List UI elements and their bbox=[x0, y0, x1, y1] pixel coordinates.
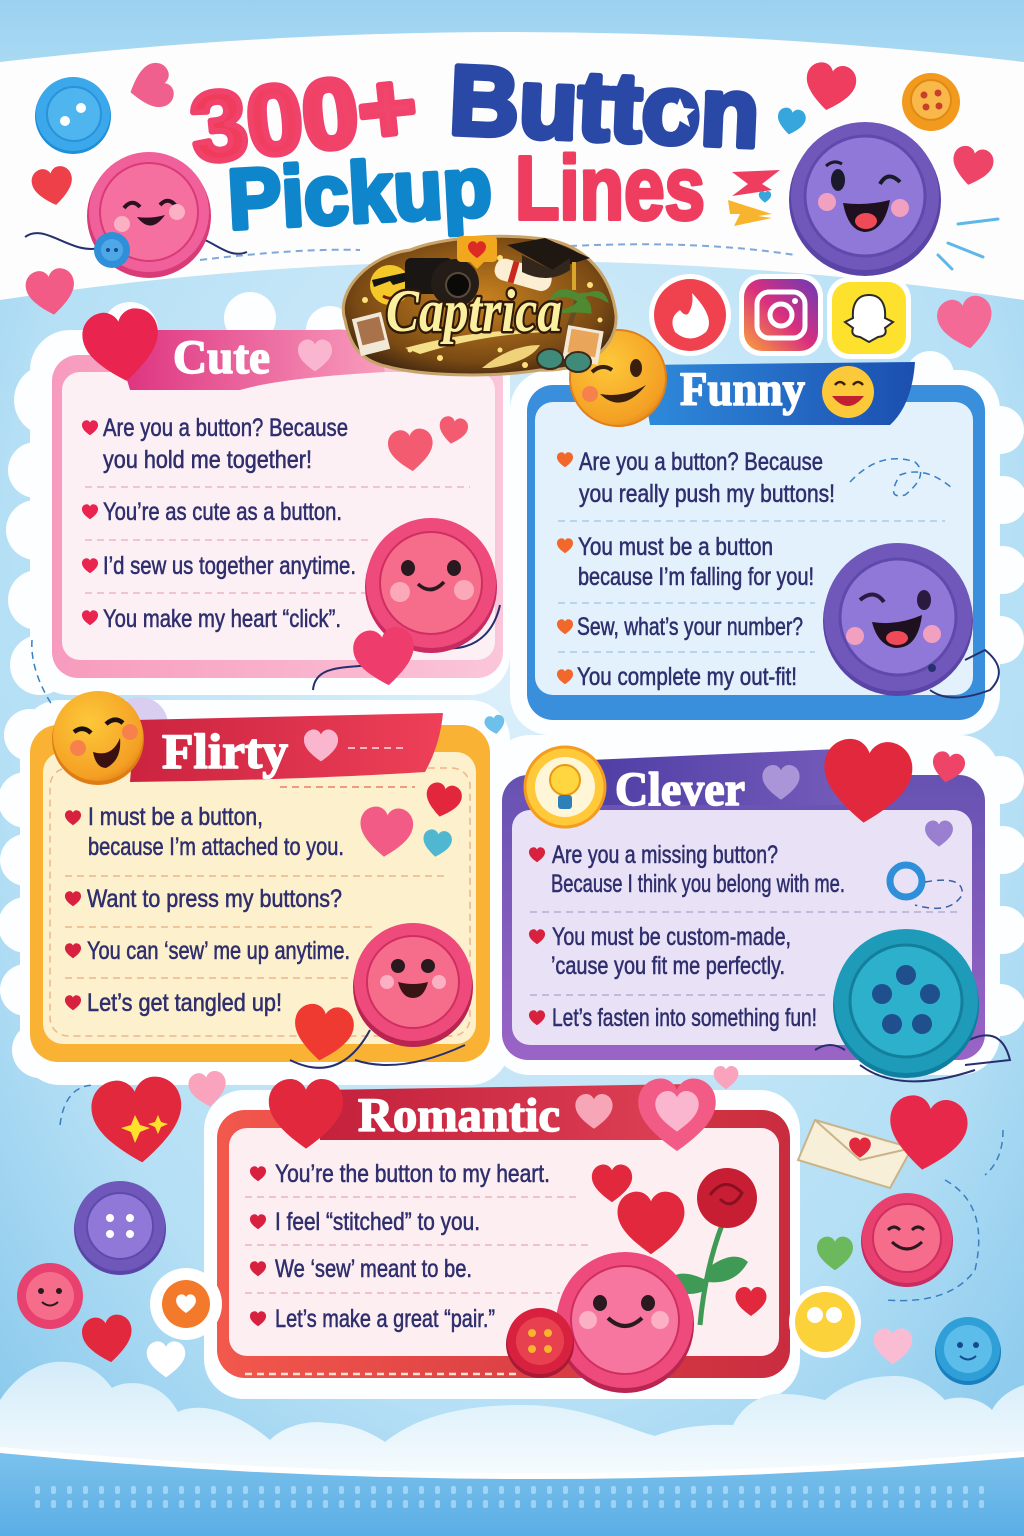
heading heart bbox=[298, 340, 332, 371]
logo sunglasses bbox=[537, 349, 591, 372]
panel body bbox=[43, 752, 476, 1044]
panel frame bbox=[52, 355, 503, 678]
logo camera bbox=[405, 258, 479, 307]
dividers bbox=[558, 521, 945, 652]
title: Lines: Lines bbox=[515, 139, 705, 239]
dividers bbox=[530, 912, 960, 995]
panel frame bbox=[502, 775, 985, 1060]
title: 300+: 300+ bbox=[186, 50, 422, 183]
dividers bbox=[85, 487, 470, 593]
icon: laughing emoji bbox=[822, 366, 874, 418]
panel body bbox=[512, 810, 972, 1045]
logo swoosh bbox=[405, 330, 558, 354]
heading: Flirty bbox=[162, 723, 288, 779]
icon: zigzag flags bbox=[728, 170, 780, 226]
line 2: You’re as cute as a button. bbox=[103, 498, 342, 526]
logo scroll bbox=[492, 256, 554, 293]
header ribbon bbox=[640, 362, 915, 425]
icon: light bulb badge bbox=[525, 747, 605, 827]
title bbox=[186, 44, 762, 248]
logo feather bbox=[482, 345, 540, 368]
icon: pink button with heart bbox=[290, 923, 473, 1068]
icon: red button bbox=[506, 1308, 574, 1378]
icon: envelope with heart bbox=[798, 1120, 912, 1188]
white strip edge bbox=[0, 1450, 1024, 1476]
icon: star in title bbox=[665, 98, 695, 127]
dashed title divider bbox=[200, 244, 795, 260]
icon: laughing emoji bbox=[52, 691, 144, 785]
icon: pink button with heart bbox=[313, 518, 500, 690]
dividers bbox=[65, 876, 445, 978]
icon: purple button bbox=[74, 1181, 166, 1275]
header ribbon bbox=[590, 748, 890, 805]
icon: small blue button bbox=[935, 1317, 1001, 1385]
hearts bbox=[592, 1164, 766, 1316]
icon: orange button top right bbox=[902, 73, 960, 131]
icon: small orange badge bbox=[150, 1268, 222, 1340]
logo wordmark: Captrica bbox=[386, 278, 562, 344]
hearts bbox=[358, 781, 464, 859]
title panel bbox=[0, 32, 1024, 300]
line 1 bbox=[529, 841, 845, 898]
icon: snapchat bbox=[827, 277, 911, 359]
icon: big red heart bbox=[820, 737, 915, 826]
logo sparkles bbox=[362, 255, 602, 368]
icon: purple winking button bbox=[823, 543, 999, 698]
line 2 bbox=[529, 923, 791, 980]
line 2: I feel “stitched” to you. bbox=[275, 1208, 480, 1236]
line 3: I’d sew us together anytime. bbox=[103, 552, 356, 580]
icon: blue button top left bbox=[35, 77, 111, 154]
ribbon dashes bbox=[348, 747, 408, 749]
logo emoji with sunglasses bbox=[370, 265, 410, 305]
panel: clever bbox=[502, 737, 1010, 1081]
icon: yellow emoji edge bbox=[789, 1286, 861, 1358]
line 2: You must be custom-made, bbox=[552, 923, 791, 951]
panel frame bbox=[217, 1110, 790, 1378]
line 2: ’cause you fit me perfectly. bbox=[551, 952, 785, 980]
title: Button: Button bbox=[447, 44, 762, 168]
heading: Clever bbox=[615, 763, 745, 816]
dividers bbox=[245, 1197, 590, 1293]
logo chat bubble bbox=[457, 236, 497, 269]
line 4: Let’s make a great “pair.” bbox=[275, 1305, 495, 1333]
panel frame bbox=[30, 725, 490, 1062]
line 1: Are you a button? Because bbox=[103, 414, 348, 442]
small heart and ring bbox=[890, 820, 962, 908]
icon: rose bbox=[665, 1168, 757, 1325]
heading: Funny bbox=[680, 363, 805, 416]
line 1: I must be a button, bbox=[88, 803, 263, 831]
line 2: Want to press my buttons? bbox=[87, 885, 342, 913]
strip dots bbox=[30, 1486, 994, 1514]
dashed threads bbox=[32, 640, 1003, 1301]
line 4: You complete my out-fit! bbox=[577, 663, 797, 691]
line 1 bbox=[82, 414, 348, 474]
icon: big heart bbox=[79, 305, 164, 386]
stitched edge bbox=[245, 1373, 520, 1375]
line 1: you hold me together! bbox=[103, 446, 312, 474]
header ribbon bbox=[130, 713, 443, 782]
icon: purple winking button bbox=[789, 122, 941, 276]
line 1: Are you a button? Because bbox=[579, 448, 823, 476]
dashed top line bbox=[280, 786, 415, 788]
line 1: you really push my buttons! bbox=[579, 480, 835, 508]
line 1: because I’m attached to you. bbox=[88, 833, 344, 861]
icon: red heart with stars bbox=[89, 1074, 187, 1167]
line 1 bbox=[557, 448, 835, 508]
icon: winking emoji bbox=[570, 330, 666, 426]
floating hearts bbox=[80, 714, 967, 1377]
icon: teal button bbox=[815, 929, 1010, 1081]
title hearts bbox=[24, 60, 997, 353]
panel body bbox=[229, 1128, 779, 1356]
line 4: You make my heart “click”. bbox=[103, 605, 341, 633]
header ribbon bbox=[320, 1084, 690, 1140]
title: Pickup: Pickup bbox=[225, 139, 494, 248]
logo photos bbox=[352, 312, 604, 365]
hearts bbox=[387, 415, 469, 473]
line 1: Because I think you belong with me. bbox=[551, 870, 845, 898]
heading: Cute bbox=[173, 331, 270, 384]
icon: small pink button bbox=[17, 1263, 83, 1329]
heading heart bbox=[762, 765, 800, 800]
line 1: You’re the button to my heart. bbox=[275, 1160, 550, 1188]
line 3: You can ‘sew’ me up anytime. bbox=[87, 937, 350, 965]
panel: romantic bbox=[217, 1078, 790, 1393]
panel: funny bbox=[527, 330, 999, 720]
logo palm bbox=[552, 291, 606, 330]
icon: spark lines bbox=[938, 219, 998, 269]
line 3: Let’s fasten into something fun! bbox=[552, 1004, 817, 1032]
line 3: Sew, what’s your number? bbox=[577, 613, 803, 641]
thread doodle bbox=[850, 459, 952, 496]
heading hearts bbox=[269, 1078, 716, 1151]
white clouds behind panels bbox=[0, 292, 1024, 1399]
panel body bbox=[62, 372, 495, 660]
line 2: because I’m falling for you! bbox=[578, 563, 814, 591]
icon: tinder bbox=[649, 274, 731, 356]
line 4: Let’s get tangled up! bbox=[87, 989, 282, 1017]
stitched edge bbox=[50, 768, 470, 1036]
decorative purple blob bbox=[112, 697, 168, 753]
logo blob bbox=[343, 236, 616, 375]
line 1: Are you a missing button? bbox=[552, 841, 778, 869]
panel body bbox=[535, 402, 973, 695]
heading: Romantic bbox=[358, 1089, 560, 1142]
panel: cute bbox=[52, 305, 503, 690]
header ribbon bbox=[112, 330, 385, 390]
top sky band bbox=[0, 0, 1024, 64]
brand logo: Captrica bbox=[343, 236, 616, 375]
icon: instagram bbox=[739, 274, 823, 356]
logo graduation cap bbox=[507, 238, 590, 290]
panel frame bbox=[527, 385, 985, 720]
icon: pink smiling button with thread bbox=[25, 152, 247, 278]
icon: red heart right bbox=[884, 1092, 971, 1175]
lower cloud band bbox=[0, 1362, 1024, 1476]
line 1 bbox=[65, 803, 344, 861]
line 3: We ‘sew’ meant to be. bbox=[275, 1255, 472, 1283]
icon: pink button right bbox=[861, 1193, 953, 1287]
heading heart bbox=[304, 730, 338, 761]
icon: pink button bbox=[556, 1252, 694, 1393]
line 2: You must be a button bbox=[578, 533, 773, 561]
line 2 bbox=[557, 533, 814, 591]
panel: flirty bbox=[30, 691, 490, 1068]
bottom dotted strip bbox=[0, 1452, 1024, 1536]
